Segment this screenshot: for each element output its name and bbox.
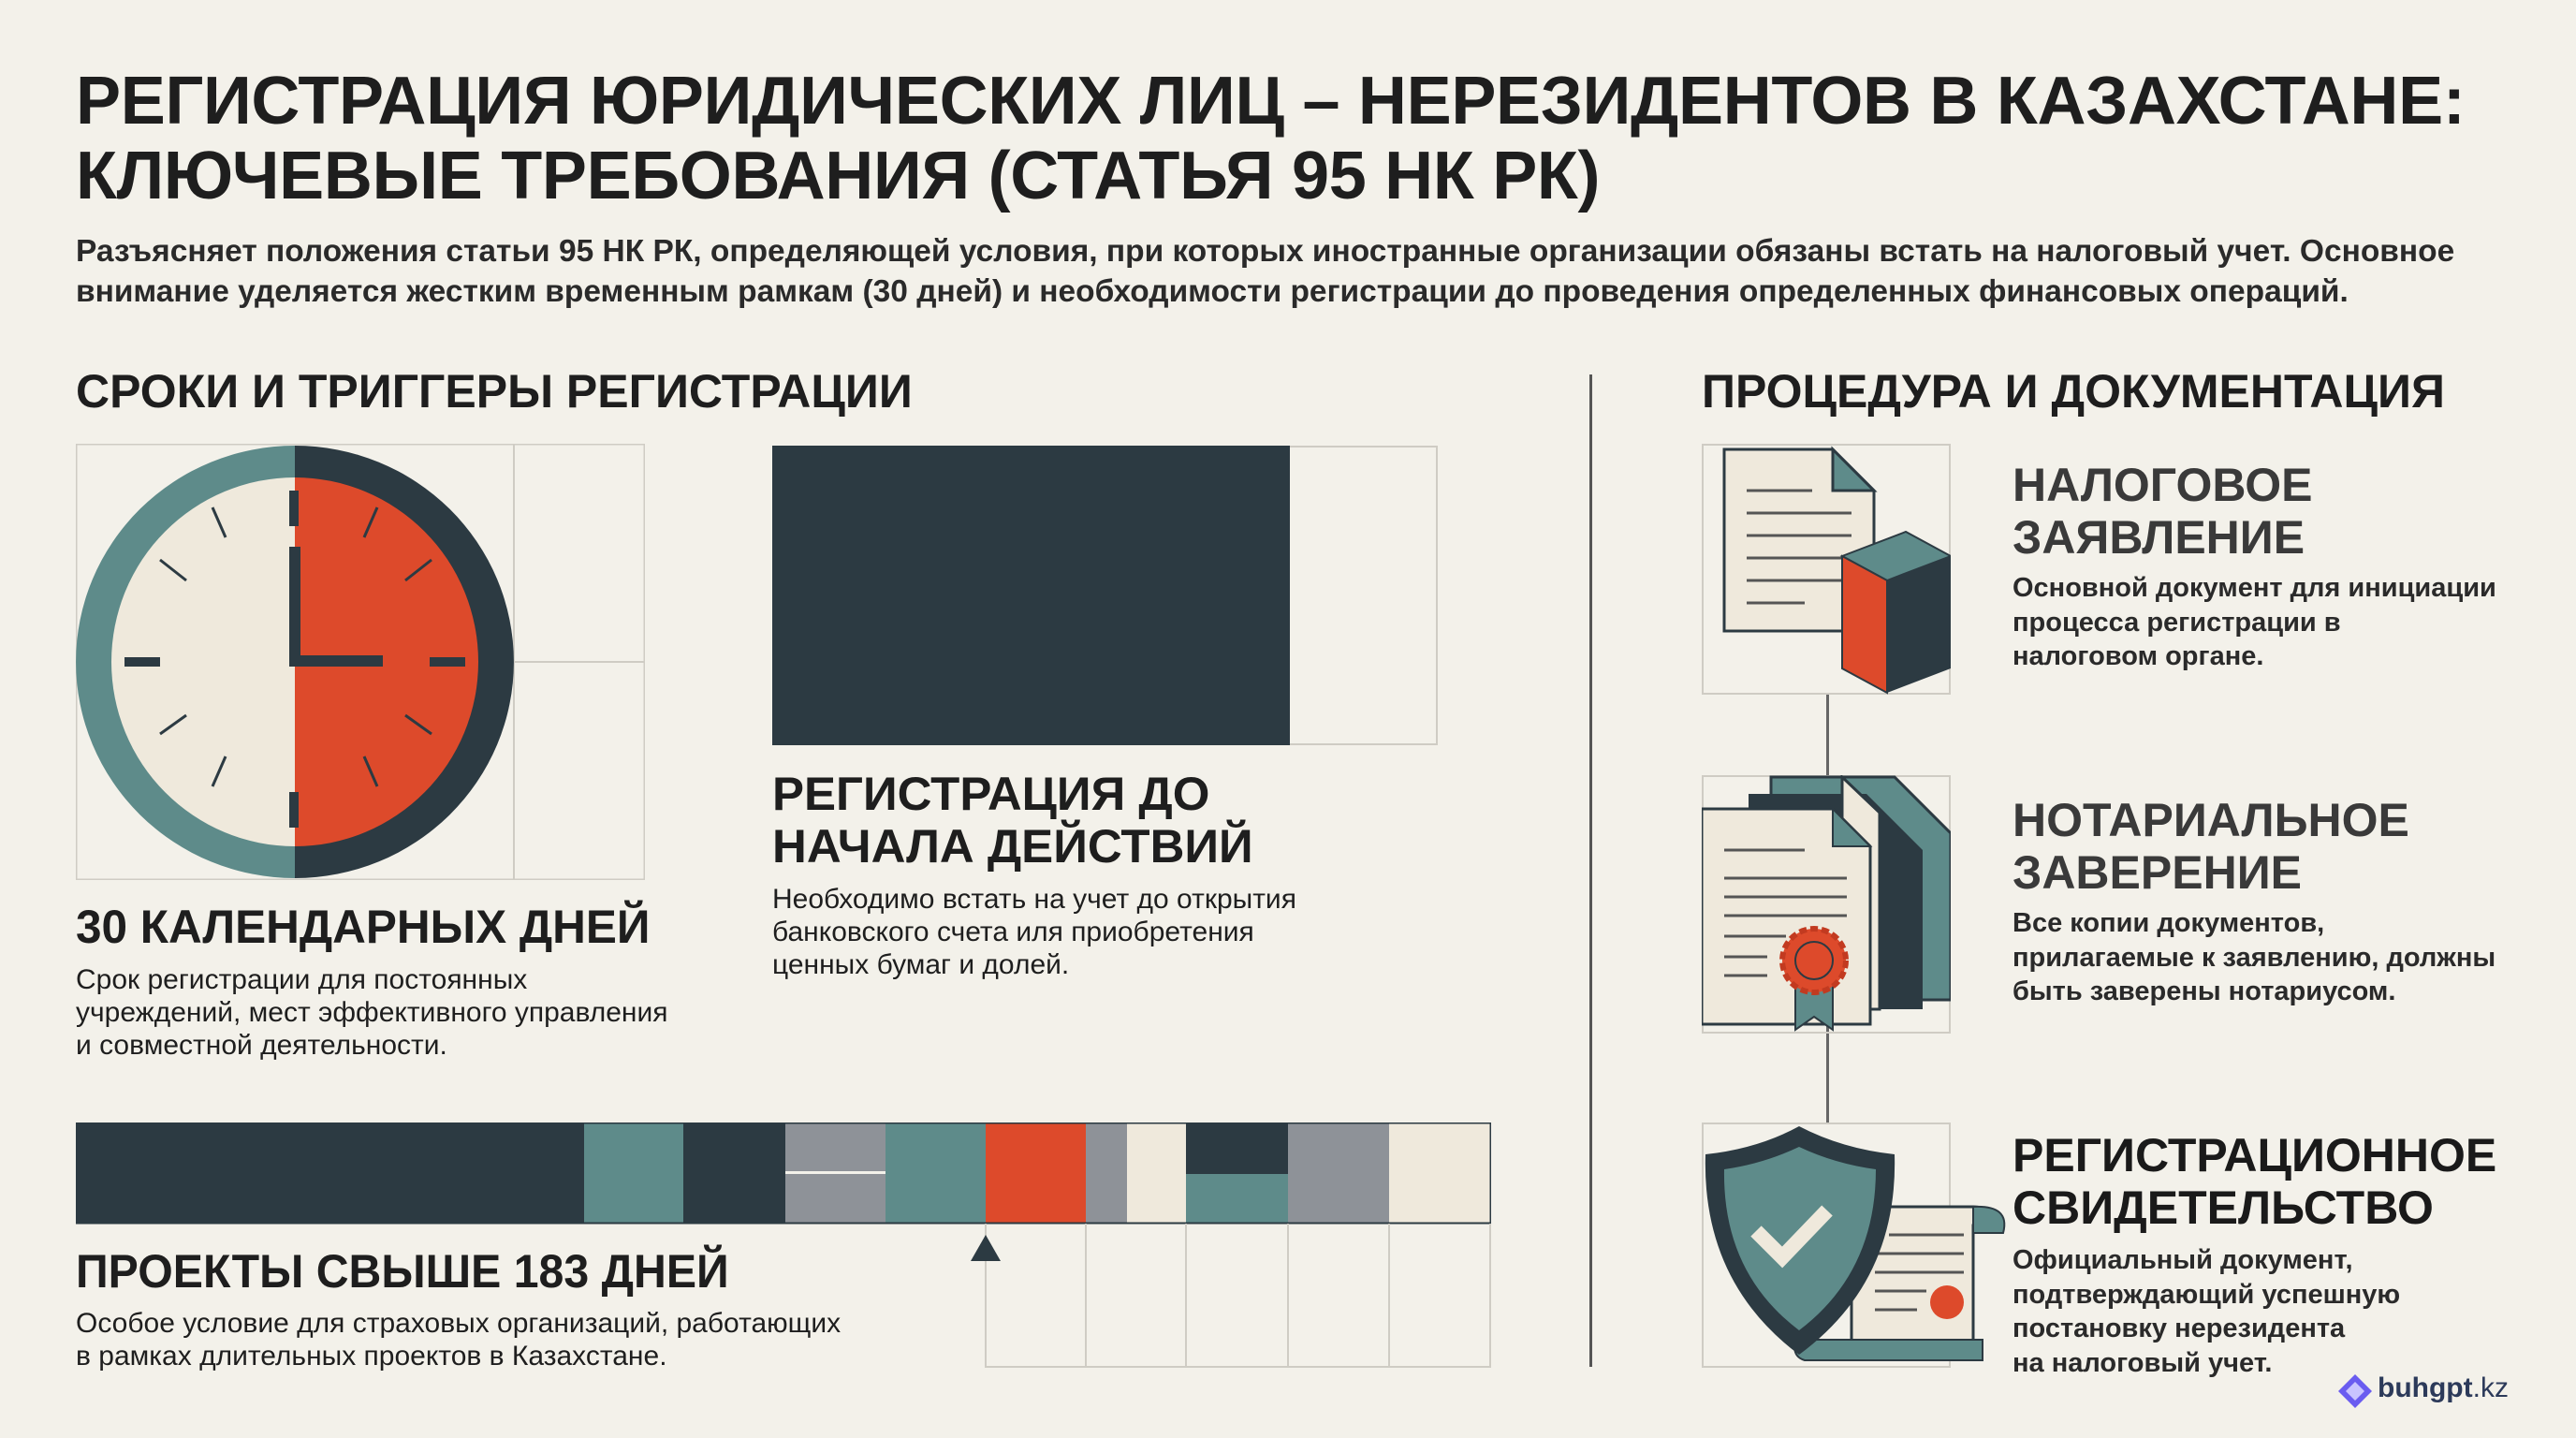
icon: notarization: [1702, 775, 1951, 1034]
text: 30 days: и совместной деятельности.: [76, 1030, 447, 1061]
text: certificate: на налоговый учет.: [2012, 1348, 2272, 1378]
heading: 183 days: ПРОЕКТЫ СВЫШЕ 183 ДНЕЙ: [76, 1245, 729, 1298]
heading: before actions: НАЧАЛА ДЕЙСТВИЙ: [772, 820, 1253, 873]
heading: notarization: [2012, 794, 2409, 899]
section heading: left: СРОКИ И ТРИГГЕРЫ РЕГИСТРАЦИИ: [76, 365, 913, 418]
title: КЛЮЧЕВЫЕ ТРЕБОВАНИЯ (СТАТЬЯ 95 НК РК): [76, 139, 1600, 213]
text: before actions: банковского счета иля приобретения: [772, 917, 1254, 947]
section heading: right: ПРОЦЕДУРА И ДОКУМЕНТАЦИЯ: [1702, 365, 2445, 418]
text: certificate: подтверждающий успешную: [2012, 1279, 2400, 1309]
text: before actions: Необходимо встать на учет до открытия: [772, 884, 1296, 915]
heading: notarization: ЗАВЕРЕНИЕ: [2012, 846, 2302, 899]
heading: tax application: ЗАЯВЛЕНИЕ: [2012, 511, 2305, 564]
title: [76, 64, 2466, 213]
title: РЕГИСТРАЦИЯ ЮРИДИЧЕСКИХ ЛИЦ – НЕРЕЗИДЕНТОВ В КАЗАХСТАНЕ:: [76, 64, 2466, 139]
text: certificate: постановку нерезидента: [2012, 1313, 2345, 1343]
text: tax application: [2012, 573, 2496, 671]
text: 183 days: [76, 1308, 841, 1372]
text: notarization: Все копии документов,: [2012, 908, 2324, 938]
text: notarization: [2012, 908, 2496, 1006]
logo: buhgpt.kz: [2378, 1372, 2509, 1403]
icon: certificate: [1702, 1123, 2005, 1368]
text: before actions: [772, 884, 1296, 980]
text: tax application: налоговом органе.: [2012, 641, 2263, 671]
heading: notarization: НОТАРИАЛЬНОЕ: [2012, 794, 2409, 846]
text: 30 days: [76, 964, 668, 1061]
text: notarization: прилагаемые к заявлению, должны: [2012, 942, 2496, 972]
text: certificate: Официальный документ,: [2012, 1245, 2353, 1275]
heading: before actions: РЕГИСТРАЦИЯ ДО: [772, 768, 1209, 820]
text: 30 days: учреждений, мест эффективного управления: [76, 997, 668, 1028]
text: 183 days: Особое условие для страховых организаций, работающих: [76, 1308, 841, 1339]
logo: [2338, 1372, 2509, 1408]
heading: tax application: [2012, 459, 2312, 564]
text: notarization: быть заверены нотариусом.: [2012, 976, 2395, 1006]
heading: tax application: НАЛОГОВОЕ: [2012, 459, 2312, 511]
heading: certificate: РЕГИСТРАЦИОННОЕ: [2012, 1129, 2496, 1181]
dark block panel: [772, 446, 1438, 745]
bar timeline: [76, 1123, 1491, 1368]
subtitle: Разъясняет положения статьи 95 НК РК, определяющей условия, при которых иностранные организации обязаны встать на налоговый учет. Основное: [76, 234, 2454, 269]
heading: certificate: [2012, 1129, 2496, 1234]
text: tax application: Основной документ для инициации: [2012, 573, 2496, 603]
text: 30 days: Срок регистрации для постоянных: [76, 964, 527, 995]
heading: before actions: [772, 768, 1253, 873]
icon: tax application: [1702, 444, 1951, 695]
heading: certificate: СВИДЕТЕЛЬСТВО: [2012, 1181, 2434, 1234]
subtitle: [76, 234, 2454, 309]
text: tax application: процесса регистрации в: [2012, 607, 2341, 637]
text: 183 days: в рамках длительных проектов в Казахстане.: [76, 1341, 667, 1372]
icon: clock: [76, 444, 645, 880]
heading: 30 days: 30 КАЛЕНДАРНЫХ ДНЕЙ: [76, 901, 650, 953]
text: before actions: ценных бумаг и долей.: [772, 949, 1069, 980]
subtitle: внимание уделяется жестким временным рамкам (30 дней) и необходимости регистрации до проведения определенных финансовых операций.: [76, 274, 2349, 309]
text: certificate: [2012, 1245, 2400, 1378]
